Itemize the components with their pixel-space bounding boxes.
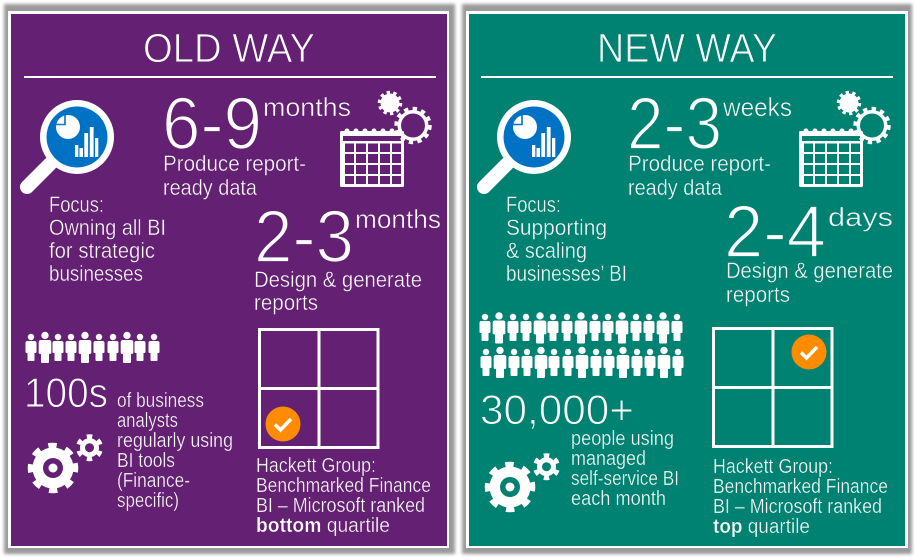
icon: people row — [26, 332, 160, 363]
stat: 6-9 months — [162, 82, 351, 165]
stat: 2-3 weeks: 2-3 — [627, 82, 722, 165]
text: hackett group: BI – Microsoft ranked — [713, 495, 882, 518]
text: produce report-ready data: Produce report- — [163, 151, 306, 176]
focus text: Focus: — [506, 192, 561, 217]
text: design and generate reports: reports — [254, 290, 318, 315]
icon: people rows — [480, 312, 684, 378]
stat: 6-9 months: months — [263, 92, 351, 122]
text: business analysts: of business — [117, 389, 204, 412]
text: hackett group — [713, 455, 888, 538]
text: people using self-service BI — [571, 427, 679, 510]
stat: 2-4 days — [724, 190, 893, 273]
stat: 100s: 100s — [24, 369, 108, 416]
icon: gears — [488, 452, 562, 510]
stat: 2-3 months: 2-3 — [254, 195, 354, 278]
text: business analysts — [117, 389, 233, 512]
stat: 30,000+: 30,000+ — [480, 386, 634, 433]
text: design and generate reports — [726, 258, 893, 307]
text: hackett group: Hackett Group: — [256, 454, 376, 477]
text: design and generate reports: reports — [726, 282, 790, 307]
text: design and generate reports: Design & generate — [726, 258, 893, 283]
panel: new way — [469, 14, 905, 546]
focus text: Owning all BI — [49, 215, 166, 240]
focus text: businesses’ BI — [506, 261, 627, 286]
focus text: & scaling — [506, 238, 587, 263]
text: design and generate reports — [254, 267, 422, 315]
focus text: businesses — [49, 261, 143, 286]
text: produce report-ready data: ready data — [628, 175, 723, 200]
text: business analysts: (Finance- — [117, 469, 190, 492]
text: produce report-ready data — [163, 151, 306, 200]
stat: 2-4 days: 2-4 — [724, 190, 826, 273]
text: hackett group: BI – Microsoft ranked — [256, 494, 425, 517]
text: people using self-service BI: self-service BI — [571, 467, 679, 490]
stat: 2-3 months: months — [355, 204, 441, 234]
icon: calendar with gears — [340, 92, 430, 187]
text: business analysts: BI tools — [117, 449, 175, 472]
title: old way: OLD WAY — [143, 25, 315, 71]
title: new way: NEW WAY — [597, 25, 777, 71]
stat: 2-3 weeks — [627, 82, 792, 165]
text: people using self-service BI: each month — [571, 487, 666, 510]
stat: 2-4 days: days — [828, 202, 893, 232]
focus text: for strategic — [49, 238, 155, 263]
text: design and generate reports: Design & generate — [254, 267, 422, 292]
text: business analysts: specific) — [117, 489, 179, 512]
focus text: Focus: — [49, 192, 104, 217]
icon: gears — [30, 433, 105, 490]
stat: 2-3 weeks: weeks — [722, 92, 792, 122]
quartile grid with top check — [714, 328, 832, 446]
stat: 6-9 months: 6-9 — [162, 82, 262, 165]
text: produce report-ready data: ready data — [163, 175, 258, 200]
text: hackett group: Benchmarked Finance — [256, 474, 431, 497]
text: people using self-service BI: people using — [571, 427, 674, 450]
icon: calendar with gears — [799, 92, 888, 187]
text: produce report-ready data: Produce report- — [628, 151, 771, 176]
text: hackett group: top quartile — [713, 515, 810, 538]
text: hackett group — [256, 454, 431, 537]
text: business analysts: analysts — [117, 409, 178, 432]
text: people using self-service BI: managed — [571, 447, 646, 470]
stat: 2-3 months — [254, 195, 441, 278]
focus text — [49, 192, 166, 286]
icon: magnifier with charts — [27, 100, 114, 187]
text: hackett group: Benchmarked Finance — [713, 475, 888, 498]
panel: old way — [11, 14, 447, 546]
quartile grid with bottom check — [260, 330, 378, 448]
icon: magnifier with charts — [484, 100, 571, 187]
text: hackett group: bottom quartile — [256, 514, 390, 537]
text: hackett group: Hackett Group: — [713, 455, 833, 478]
focus text: Supporting — [506, 215, 607, 240]
text: produce report-ready data — [628, 151, 771, 200]
focus text — [506, 192, 627, 286]
text: business analysts: regularly using — [117, 429, 233, 452]
